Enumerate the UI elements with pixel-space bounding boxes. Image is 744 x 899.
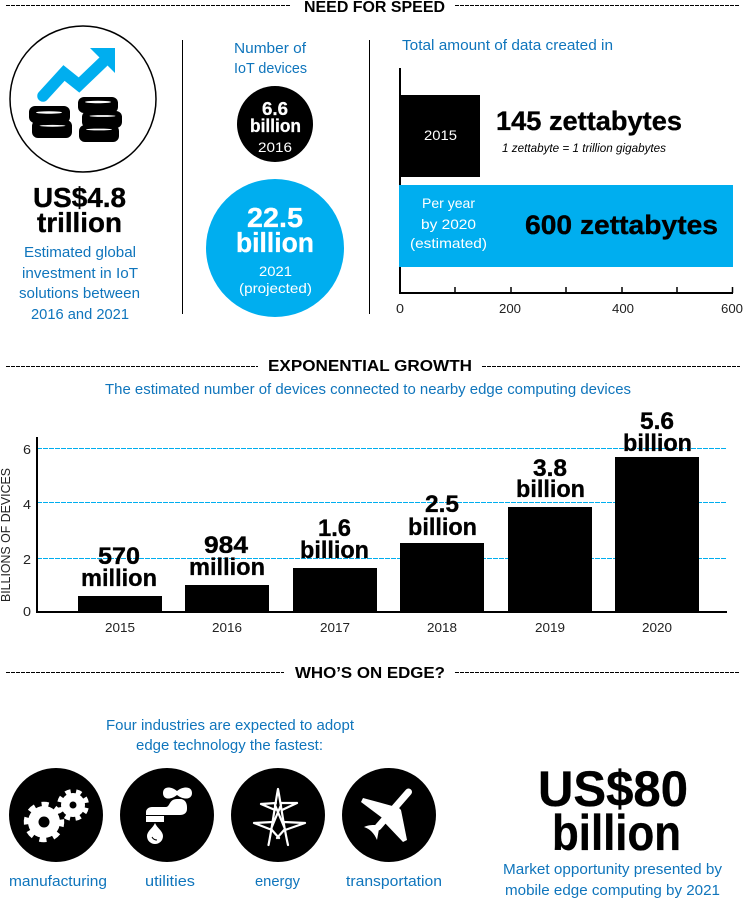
label: 145 zettabytes: 145 zettabytes: [496, 106, 682, 136]
stat: US$80 billion: US$80: [538, 761, 688, 817]
stat: US$4.8 trillion: [33, 182, 126, 238]
y axis labels: 0: [23, 604, 31, 619]
bar: 2020: by 2020: [421, 216, 476, 232]
stat circle: 22.5 billion 2021: [206, 179, 344, 317]
icon: manufacturing gears: [9, 768, 103, 862]
icon: energy tower: [231, 768, 325, 862]
label: manufacturing: manufacturing: [9, 873, 107, 890]
stat: US$4.8 trillion: US$4.8: [33, 182, 126, 213]
section: exponential growth: [0, 358, 740, 635]
text: number of IoT devices: IoT devices: [234, 60, 307, 77]
text: chart subtitle: The estimated number of devices connected to nearby edge computing devices: [105, 381, 631, 398]
bar: 2015: 2015: [424, 127, 457, 143]
axis labels: 0: [396, 301, 404, 316]
text: market opportunity: mobile edge computing by 2021: [505, 882, 720, 899]
text: investment description: solutions between: [19, 285, 140, 302]
value labels: [81, 408, 692, 592]
value labels: 5.6: [640, 408, 674, 435]
text: investment description: [19, 244, 140, 323]
stat circle: 6.6 billion 2016: 6.6: [262, 99, 288, 119]
x axis labels: 2015: [105, 620, 135, 635]
stat circle: 6.6 billion 2016: [237, 86, 313, 162]
x axis labels: 2017: [320, 620, 350, 635]
value labels: million: [81, 565, 157, 592]
text: market opportunity: [503, 861, 723, 899]
value labels: 2.5: [425, 491, 459, 518]
chart: devices per year: [0, 408, 727, 635]
text: number of IoT devices: Number of: [234, 40, 307, 57]
heading: who's on edge: WHO’S ON EDGE?: [295, 665, 445, 682]
chart: zettabytes bars: [396, 68, 743, 316]
text: investment description: Estimated global: [24, 244, 136, 261]
value labels: billion: [408, 514, 477, 541]
text: investment description: investment in IoT: [22, 265, 138, 282]
label: utilities: utilities: [145, 873, 195, 890]
stat circle: 22.5 billion 2021: (projected): [239, 280, 312, 296]
stat circle: 22.5 billion 2021: 22.5: [247, 202, 303, 233]
y axis labels: 2: [23, 552, 31, 567]
text: market opportunity: Market opportunity presented by: [503, 861, 723, 878]
x axis labels: 2016: [212, 620, 242, 635]
stat circle: 22.5 billion 2021: 2021: [259, 263, 292, 279]
icon: transportation plane: [342, 768, 436, 862]
value labels: 1.6: [318, 515, 351, 542]
text: total amount of data: Total amount of data created in: [402, 37, 613, 54]
axis labels: [396, 301, 743, 316]
text: investment description: 2016 and 2021: [31, 306, 129, 323]
y axis labels: [0, 442, 31, 619]
bar: 2020: (estimated): [410, 235, 487, 251]
x axis labels: 2020: [642, 620, 672, 635]
label: 145 zettabytes: 1 zettabyte = 1 trillion gigabytes: [502, 141, 666, 155]
section: who's on edge: [6, 665, 740, 899]
x axis labels: [105, 620, 672, 635]
axis labels: 600: [721, 301, 743, 316]
value labels: 570: [98, 543, 140, 570]
bar: 2020: 600 zettabytes: [525, 210, 718, 240]
panel: total data created: [396, 37, 743, 316]
section: need for speed: [6, 0, 743, 323]
bars: [78, 457, 699, 612]
label: energy: energy: [255, 873, 300, 890]
bar: 2015: [400, 95, 480, 177]
value labels: 3.8: [533, 455, 567, 482]
x axis labels: 2019: [535, 620, 565, 635]
stat: US$80 billion: billion: [552, 805, 681, 861]
heading: exponential growth: EXPONENTIAL GROWTH: [268, 358, 472, 375]
text: four industries: edge technology the fastest:: [136, 737, 323, 754]
axis labels: 400: [612, 301, 634, 316]
panel: investment: [10, 26, 156, 323]
stat circle: 6.6 billion 2016: 2016: [258, 139, 292, 155]
y axis labels: 4: [23, 497, 31, 512]
axis labels: 200: [499, 301, 521, 316]
stat circle: 6.6 billion 2016: billion: [250, 116, 301, 136]
text: number of IoT devices: [234, 40, 307, 77]
icon: rising arrow and coins: [10, 26, 156, 172]
value labels: 984: [204, 532, 249, 559]
y axis labels: 6: [23, 442, 31, 457]
text: four industries: Four industries are expected to adopt: [106, 717, 355, 734]
text: four industries: [106, 717, 355, 754]
value labels: billion: [516, 476, 585, 503]
label: transportation: transportation: [346, 873, 442, 890]
label: 145 zettabytes: [496, 106, 682, 155]
bar: 2020: [399, 185, 733, 267]
panel: IoT devices: [206, 40, 344, 317]
x axis labels: 2018: [427, 620, 457, 635]
icon: utilities tap: [120, 768, 214, 862]
value labels: billion: [300, 537, 369, 564]
bar: 2020: Per year: [422, 195, 475, 211]
value labels: billion: [623, 430, 692, 457]
stat: US$4.8 trillion: trillion: [37, 207, 122, 238]
value labels: million: [189, 554, 265, 581]
stat circle: 22.5 billion 2021: billion: [236, 227, 314, 258]
stat: US$80 billion: [538, 761, 688, 861]
